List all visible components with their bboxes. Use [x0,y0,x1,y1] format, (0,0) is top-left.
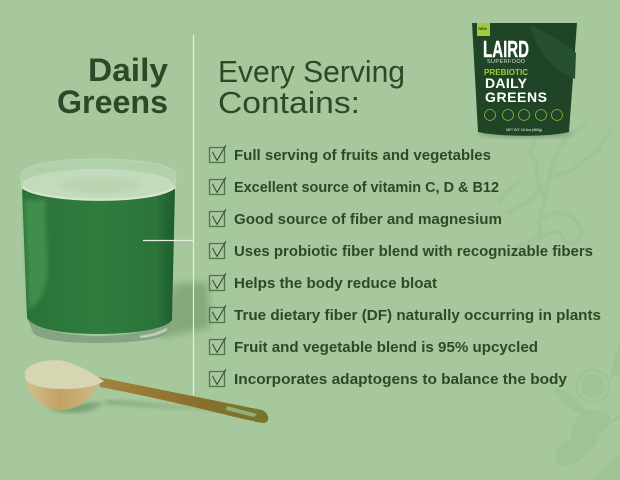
heading: Every Serving Contains: Contains: [218,85,360,120]
liquid top edge [22,187,175,200]
product bag: DAILY [485,75,528,91]
net weight: NET WT. 16.4oz (465g) [506,128,543,132]
scoop handle [98,377,268,423]
heading: Daily Greens: Greens [57,84,168,120]
heading: Daily Greens [57,52,168,120]
glass base [27,317,172,343]
product bag: SUPERFOOD [487,59,525,65]
botanical illustration: lemon and greens [553,343,620,480]
new badge: NEW [478,27,487,31]
foam surface [22,169,174,201]
scoop slot [226,406,257,417]
lemon [577,370,609,402]
item 2: Excellent source of vitamin C, D & B12 [234,180,499,196]
kale [556,410,610,466]
item 7: Fruit and vegetable blend is 95% upcycled [234,340,538,356]
bag shadow [477,130,573,138]
product bag: GREENS [485,89,547,105]
item 1: Full serving of fruits and vegetables [234,148,491,164]
item 5: Helps the body reduce bloat [234,276,437,292]
brand: LAIRD [483,36,529,62]
bag feature icons [484,110,562,120]
heading: Every Serving Contains [218,54,405,120]
glass rim [21,159,176,192]
pointer line [143,240,193,242]
bag leaf pattern [530,25,576,79]
divider lines [192,35,194,395]
scoop shadow [48,400,240,413]
liquid highlight [24,200,48,310]
heading: Every Serving Contains: Every Serving [218,54,405,89]
checklist [210,145,601,388]
item 8: Incorporates adaptogens to balance the body [234,372,567,388]
glass shadow [160,282,210,338]
item 3: Good source of fiber and magnesium [234,212,502,228]
bag body [472,23,577,136]
item 4: Uses probiotic fiber blend with recognizable fibers [234,244,593,260]
product label: PREBIOTIC [484,68,528,77]
scoop bowl [25,373,96,410]
liquid body [22,187,175,334]
item 6: True dietary fiber (DF) naturally occurring in plants [234,308,601,324]
product bag [472,23,577,138]
scoop powder [25,360,104,389]
heading: Daily Greens: Daily [88,52,168,88]
base highlight [140,329,167,337]
measuring scoop [25,360,268,423]
botanical illustration: seaweed [498,123,610,247]
leaves [553,343,620,480]
glass of greens [21,159,176,343]
